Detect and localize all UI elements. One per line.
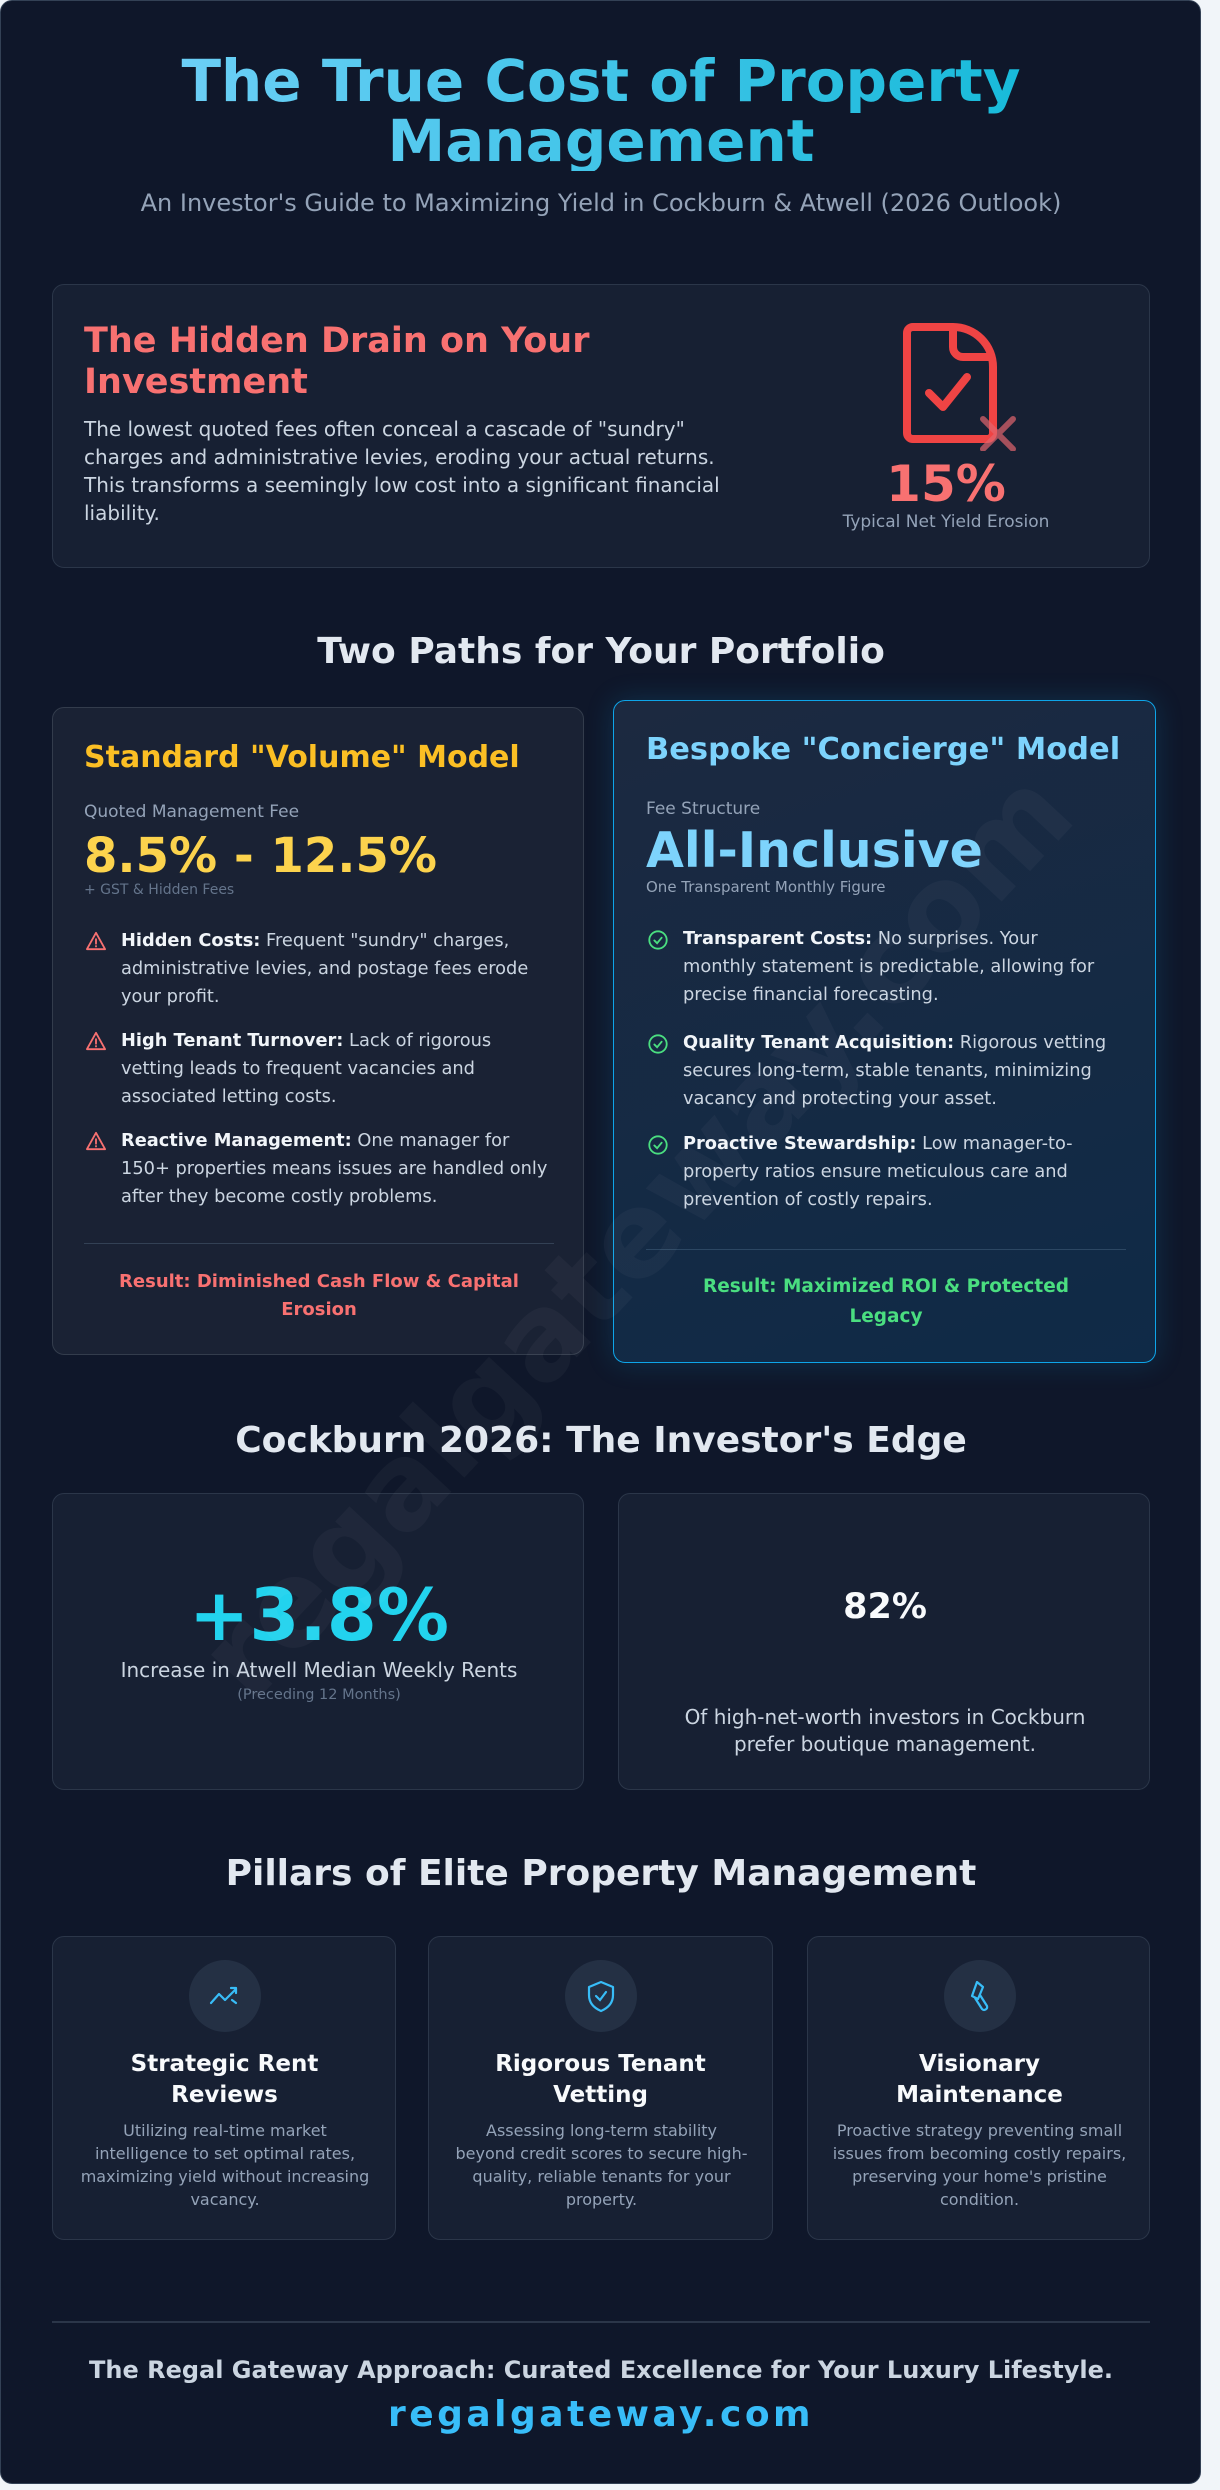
stat: 15%: 15% <box>886 455 1006 513</box>
fee note: + GST & Hidden Fees <box>84 882 234 898</box>
icon: document with x <box>903 323 1016 451</box>
heading: Bespoke "Concierge" Model <box>646 732 1120 767</box>
body text: The lowest quoted fees often conceal a cascade of "sundry" charges and administrative levies, eroding your actual returns. This transforms a seemingly low cost into a significant financial liability. <box>84 417 720 525</box>
title: Rigorous Tenant <box>495 2051 706 2077</box>
watermark: regalgateway.com <box>171 744 1099 1725</box>
fee value: 8.5% - 12.5% <box>84 828 437 884</box>
panel: bespoke concierge model <box>613 700 1156 1363</box>
subtitle: An Investor's Guide to Maximizing Yield in Cockburn & Atwell (2026 Outlook) <box>141 189 1061 217</box>
title: Management <box>388 107 814 175</box>
title <box>495 2051 706 2108</box>
pillar: maintenance <box>807 1936 1150 2240</box>
icon: trend <box>189 1960 261 2032</box>
title: Visionary <box>919 2051 1040 2077</box>
pillar: rent reviews <box>52 1936 396 2240</box>
bullet: reactive: Reactive Management: One manager for 150+ properties means issues are handled only after they become costly problems. <box>121 1130 547 1207</box>
panel: stat rents <box>52 1493 584 1790</box>
desc: Assessing long-term stability beyond credit scores to secure high-quality, reliable tenants for your property. <box>456 2121 747 2209</box>
bullet: hidden costs: Hidden Costs: Frequent "sundry" charges, administrative levies, and postage fees erode your profit. <box>121 930 528 1007</box>
result: Result: Diminished Cash Flow & Capital Erosion <box>119 1271 519 1320</box>
stat value: +3.8% <box>189 1573 449 1657</box>
panel: hidden drain <box>52 284 1150 568</box>
bullet: quality: Quality Tenant Acquisition: Rigorous vetting secures long-term, stable tenants, minimizing vacancy and protecting your asset. <box>683 1032 1106 1109</box>
title: Vetting <box>553 2082 648 2108</box>
heading: investor's edge: Cockburn 2026: The Investor's Edge <box>235 1420 967 1461</box>
title: Reviews <box>171 2082 278 2108</box>
bullet: turnover: High Tenant Turnover: Lack of rigorous vetting leads to frequent vacancies and associated letting costs. <box>121 1030 491 1107</box>
heading: two paths: Two Paths for Your Portfolio <box>317 631 885 672</box>
stat label: Increase in Atwell Median Weekly Rents <box>121 1658 517 1682</box>
bullet: proactive: Proactive Stewardship: Low manager-to-property ratios ensure meticulous care and prevention of costly repairs. <box>683 1133 1073 1210</box>
icon: tools <box>944 1960 1016 2032</box>
icon: shield <box>565 1960 637 2032</box>
title <box>131 2051 318 2108</box>
heading: hidden drain: The Hidden Drain on Your Investment <box>84 321 589 402</box>
fee label: Quoted Management Fee <box>84 802 299 822</box>
stat label: Typical Net Yield Erosion <box>843 512 1049 532</box>
fee value: All-Inclusive <box>646 822 983 879</box>
footer url: regalgateway.com <box>388 2394 814 2435</box>
stat value: 82% <box>843 1587 927 1627</box>
panel: standard volume model <box>52 707 584 1355</box>
fee note: One Transparent Monthly Figure <box>646 878 886 896</box>
title: Maintenance <box>896 2082 1063 2108</box>
result: Result: Maximized ROI & Protected Legacy <box>703 1276 1069 1327</box>
title: The True Cost of Property <box>181 47 1021 115</box>
desc: Proactive strategy preventing small issues from becoming costly repairs, preserving your home's pristine condition. <box>833 2121 1126 2209</box>
desc: Utilizing real-time market intelligence to set optimal rates, maximizing yield without increasing vacancy. <box>81 2121 369 2209</box>
heading: Standard "Volume" Model <box>84 740 520 775</box>
pillar: tenant vetting <box>428 1936 773 2240</box>
bullet: transparent: Transparent Costs: No surprises. Your monthly statement is predictable, allowing for precise financial forecasting. <box>683 928 1094 1005</box>
title <box>1 51 1201 171</box>
stat sub: (Preceding 12 Months) <box>237 1687 401 1703</box>
title <box>896 2051 1063 2108</box>
footer tagline: The Regal Gateway Approach: Curated Excellence for Your Luxury Lifestyle. <box>89 2356 1113 2384</box>
stat label: Of high-net-worth investors in Cockburn prefer boutique management. <box>685 1705 1085 1756</box>
panel: stat 82% <box>618 1493 1150 1790</box>
fee label: Fee Structure <box>646 799 760 819</box>
title: Strategic Rent <box>131 2051 318 2077</box>
heading: pillars: Pillars of Elite Property Management <box>226 1853 976 1894</box>
